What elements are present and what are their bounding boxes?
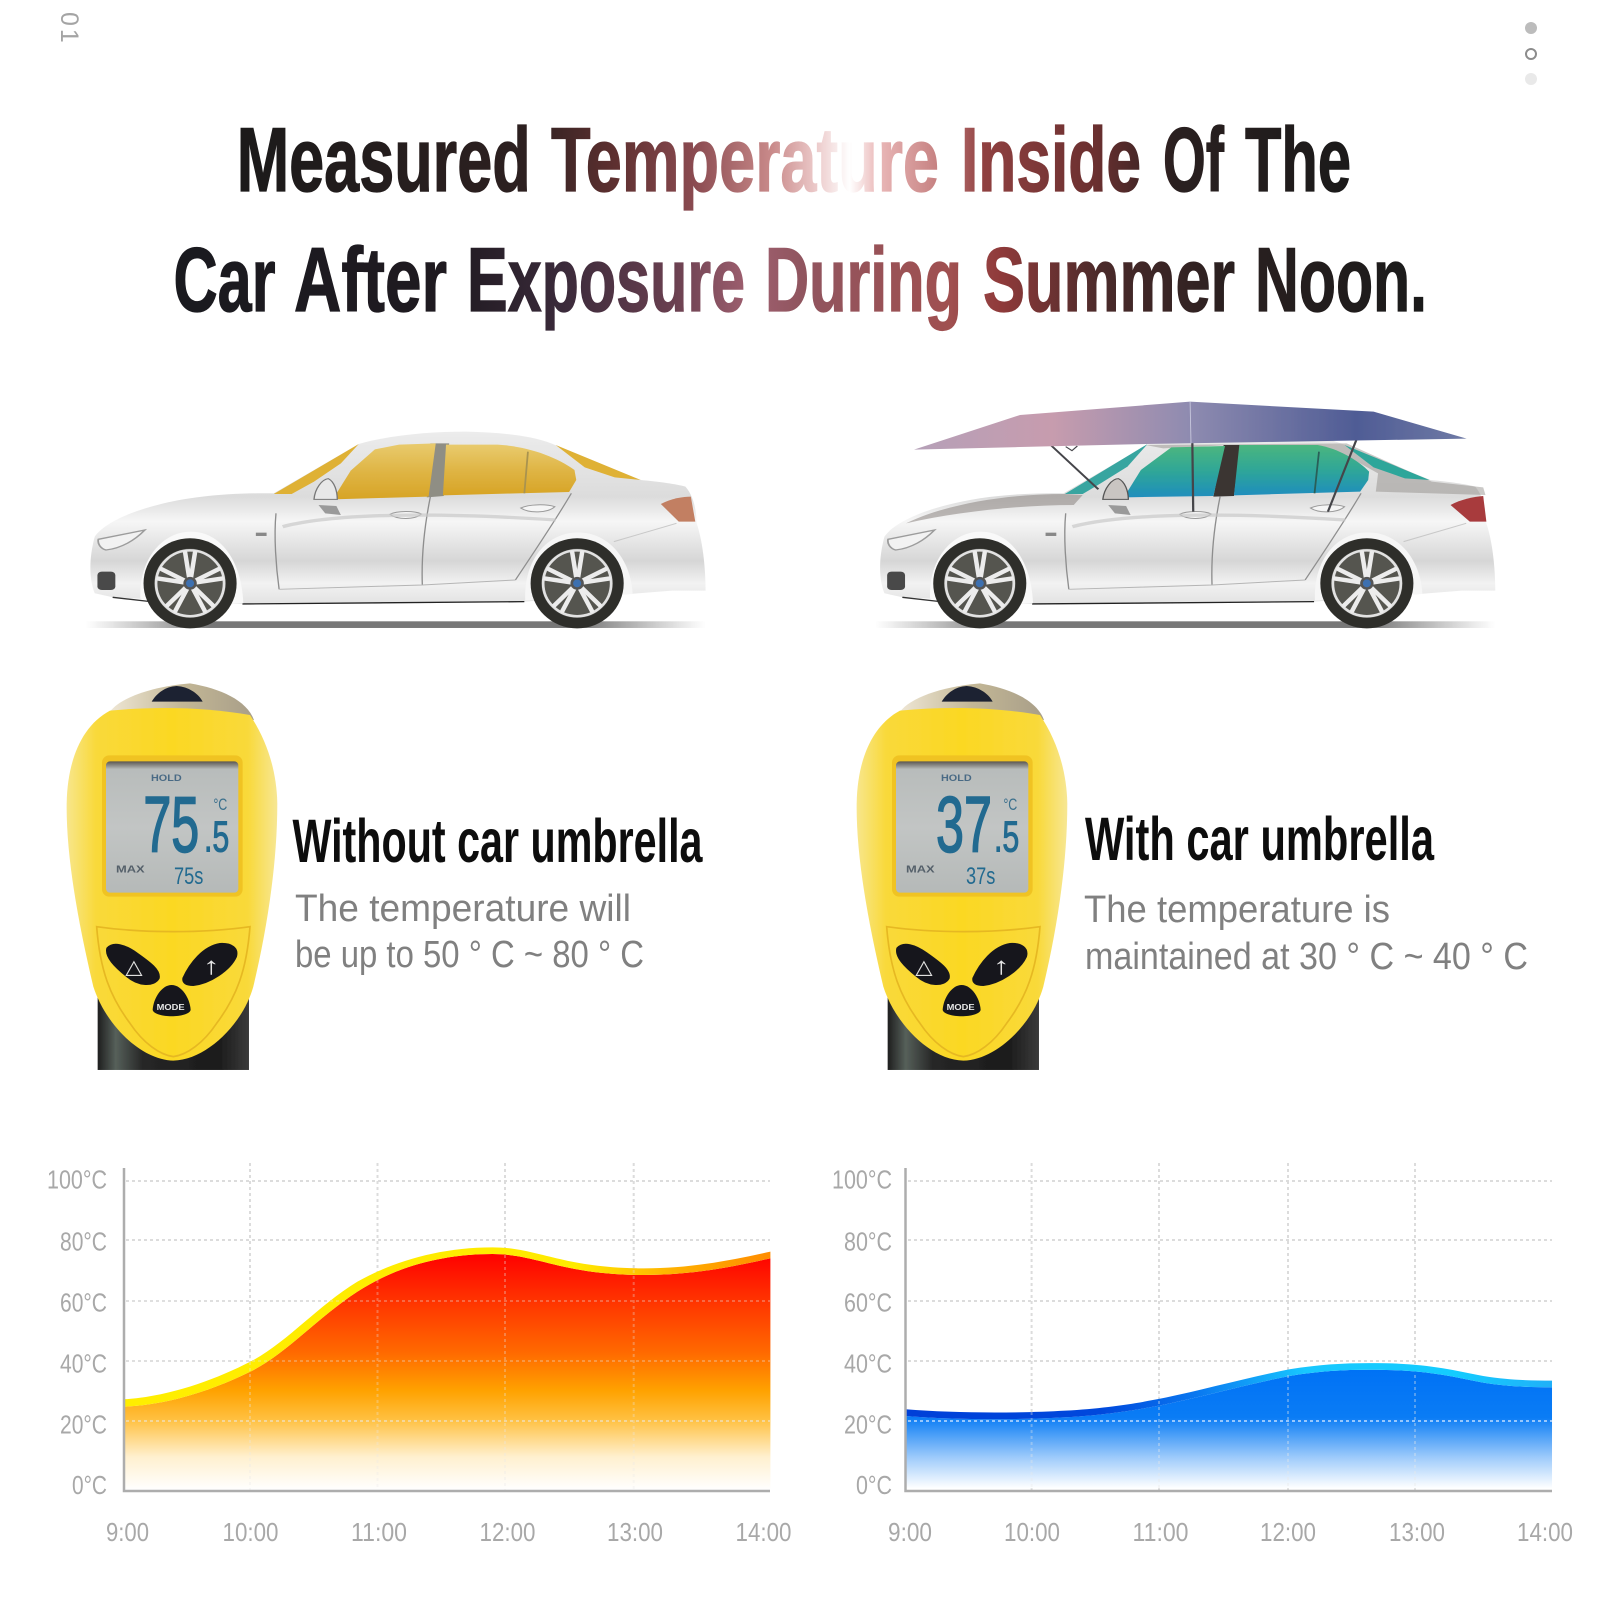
main reading: 37 <box>936 780 992 869</box>
right button <box>973 944 1026 985</box>
heading: with car umbrella: With car umbrella <box>1085 805 1435 873</box>
sensor dome <box>942 686 993 702</box>
title: Noon. <box>1255 230 1427 331</box>
chart: temperature with umbrella <box>832 1163 1573 1547</box>
y axis labels: 100°C <box>832 1164 892 1194</box>
decimal reading: .5 <box>994 814 1019 862</box>
title: Measured <box>237 110 531 211</box>
max label: MAX <box>906 865 935 876</box>
door pillar <box>427 443 449 497</box>
windshield strip <box>274 444 359 494</box>
x axis labels: 12:00 <box>480 1517 536 1547</box>
y axis labels <box>47 1164 107 1500</box>
hood shading <box>906 494 1083 523</box>
button panel outline <box>887 927 1040 1057</box>
title: Of <box>1163 110 1224 211</box>
lcd screen <box>896 761 1028 893</box>
20 degree grid line over area <box>908 1420 1552 1422</box>
door pillar <box>1213 445 1240 497</box>
screen bezel <box>892 755 1033 897</box>
yellow body <box>857 708 1067 1061</box>
description: with umbrella: The temperature is <box>1084 889 1390 931</box>
title: Summer <box>983 230 1235 331</box>
title: Temperature <box>551 110 939 211</box>
x axis labels: 13:00 <box>607 1517 663 1547</box>
rear window <box>443 445 576 495</box>
area and curve <box>124 1247 770 1490</box>
max label: MAX <box>116 865 145 876</box>
side mirror <box>1103 479 1128 499</box>
text block: without car umbrella <box>292 807 703 976</box>
description: with umbrella: maintained at 30 ° C ~ 40 ° C <box>1085 936 1528 978</box>
degree unit: °C <box>213 795 227 814</box>
y axis labels: 40°C <box>60 1348 107 1378</box>
max reading: 37s <box>966 863 995 890</box>
y axis labels: 20°C <box>60 1410 107 1440</box>
thermometer right 37.5 <box>857 683 1067 1070</box>
axes <box>124 1168 770 1491</box>
x axis labels: 11:00 <box>1132 1517 1188 1547</box>
y axis labels: 20°C <box>844 1410 892 1440</box>
x axis labels: 10:00 <box>222 1517 278 1547</box>
chart: temperature without umbrella <box>47 1163 792 1547</box>
heading: without car umbrella: Without car umbrella <box>292 807 703 875</box>
mode label: MODE <box>947 1003 975 1012</box>
yellow body <box>67 708 277 1061</box>
top cap <box>900 683 1044 720</box>
grid lines <box>908 1163 1552 1491</box>
left button <box>897 945 949 984</box>
y axis labels: 60°C <box>844 1288 892 1318</box>
y axis labels: 40°C <box>844 1348 892 1378</box>
lcd screen <box>106 761 238 893</box>
right button arrow: ↑ <box>203 953 220 980</box>
pagination dots <box>1525 22 1537 85</box>
description: without umbrella <box>295 888 644 976</box>
faint grid over area <box>126 1255 770 1491</box>
title: The <box>1245 110 1351 211</box>
decimal reading: .5 <box>204 814 229 862</box>
area and curve <box>905 1363 1552 1488</box>
mode label: MODE <box>157 1003 185 1012</box>
umbrella center rib <box>1189 402 1192 443</box>
top cap <box>110 683 254 720</box>
text block: with car umbrella <box>1084 805 1528 978</box>
title: Car <box>174 230 276 331</box>
sensor dome <box>152 686 203 702</box>
description: without umbrella: be up to 50 ° C ~ 80 ° C <box>295 934 644 976</box>
front window <box>333 443 436 499</box>
tail light <box>1451 496 1486 522</box>
x axis labels: 14:00 <box>736 1517 792 1547</box>
hold label: HOLD <box>941 773 972 783</box>
windshield strip <box>1065 444 1148 494</box>
x axis labels: 9:00 <box>106 1517 149 1547</box>
umbrella canopy <box>914 402 1467 450</box>
car with umbrella <box>876 402 1495 628</box>
y axis labels: 60°C <box>60 1288 107 1318</box>
title: Exposure <box>467 230 745 331</box>
front window <box>1124 446 1225 497</box>
title: During <box>765 230 962 331</box>
handle <box>888 997 1039 1070</box>
x axis labels <box>106 1517 792 1547</box>
y axis labels: 0°C <box>72 1470 107 1500</box>
max reading: 75s <box>174 863 203 890</box>
y axis labels: 80°C <box>60 1226 107 1256</box>
right button <box>183 944 236 985</box>
left button icon: △ <box>125 956 143 978</box>
title: After <box>294 230 447 331</box>
title <box>174 110 1427 331</box>
x axis labels: 13:00 <box>1389 1517 1445 1547</box>
main reading: 75 <box>143 780 199 869</box>
x axis labels <box>888 1517 1573 1547</box>
button panel outline <box>97 927 250 1057</box>
description: with umbrella <box>1084 889 1528 978</box>
y axis labels: 100°C <box>47 1164 107 1194</box>
rear glass strip <box>1344 445 1430 480</box>
x axis labels: 11:00 <box>351 1517 407 1547</box>
page number 01: 01 <box>55 12 83 46</box>
handle <box>98 997 249 1070</box>
side mirror <box>314 479 337 499</box>
window divider <box>1315 452 1319 493</box>
title: Inside <box>961 110 1141 211</box>
tail light <box>661 497 695 522</box>
mode button <box>153 985 191 1016</box>
screen bezel <box>102 755 243 897</box>
rear window <box>1234 445 1369 495</box>
axes <box>906 1168 1552 1491</box>
left button icon: △ <box>915 956 933 978</box>
right button arrow: ↑ <box>993 953 1010 980</box>
y axis labels: 0°C <box>856 1470 892 1500</box>
x axis labels: 12:00 <box>1260 1517 1316 1547</box>
y axis labels: 80°C <box>844 1226 892 1256</box>
hold label: HOLD <box>151 773 182 783</box>
roof and rear deck shading <box>1145 443 1485 495</box>
mode button <box>943 985 981 1016</box>
faint grid over area <box>1032 1375 1415 1491</box>
rear glass strip <box>556 445 641 480</box>
degree unit: °C <box>1003 795 1017 814</box>
umbrella support poles <box>1051 439 1357 512</box>
description: without umbrella: The temperature will <box>295 888 631 930</box>
y axis labels <box>832 1164 892 1500</box>
window divider <box>524 452 528 493</box>
thermometer left 75.5 <box>67 683 277 1070</box>
x axis labels: 9:00 <box>888 1517 932 1547</box>
car without umbrella <box>86 432 706 628</box>
left button <box>107 945 159 984</box>
grid lines <box>126 1163 770 1491</box>
x axis labels: 10:00 <box>1004 1517 1060 1547</box>
20 degree grid line over area <box>126 1420 770 1422</box>
x axis labels: 14:00 <box>1517 1517 1573 1547</box>
